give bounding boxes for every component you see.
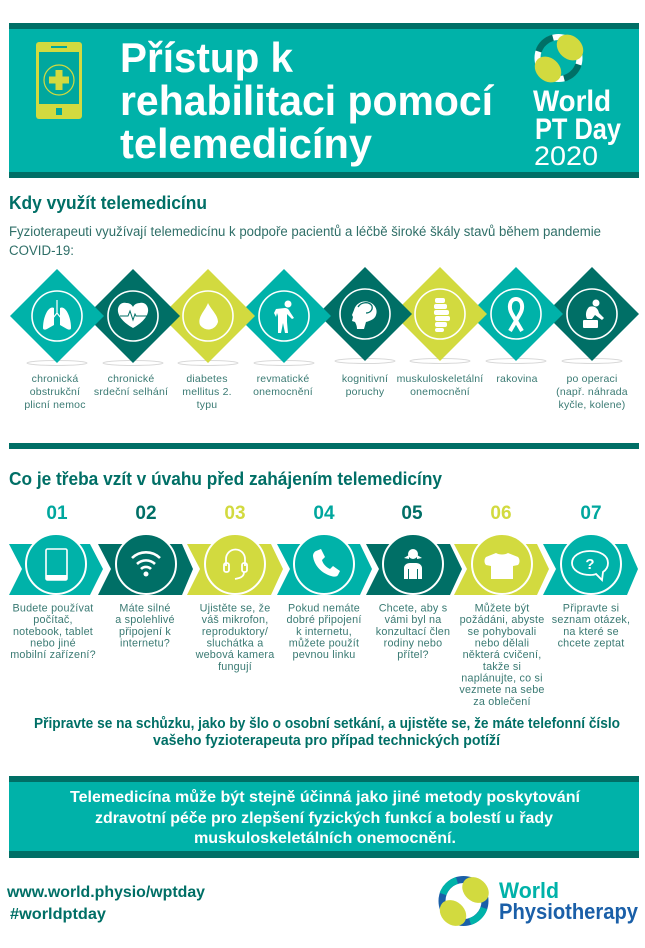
- conclusion banner: [9, 776, 639, 858]
- step descriptions: a spolehlivé: [115, 614, 175, 626]
- step descriptions: [10, 602, 630, 708]
- step descriptions: takže si: [483, 661, 521, 673]
- intro paragraph: Fyzioterapeuti využívají telemedicínu k podpoře pacientů a léčbě široké škály stavů během pandemie: [9, 224, 601, 239]
- step numbers: 05: [401, 503, 423, 524]
- step descriptions: požádáni, abyste: [460, 614, 544, 626]
- step descriptions: nebo jiné: [30, 638, 76, 650]
- condition labels: kognitivní: [342, 373, 388, 385]
- step descriptions: Budete používat: [12, 602, 94, 614]
- step descriptions: počítač,: [33, 614, 73, 626]
- logo: World Physiotherapy: World: [499, 878, 559, 903]
- panel: step chevrons: [9, 534, 638, 595]
- condition labels: onemocnění: [253, 386, 313, 398]
- preparation note: [34, 716, 620, 749]
- condition labels: plicní nemoc: [24, 399, 86, 411]
- step descriptions: vámi byl na: [385, 614, 441, 626]
- step numbers: 03: [224, 503, 246, 524]
- conclusion banner: muskuloskeletálních onemocnění.: [194, 830, 456, 847]
- intro paragraph: COVID-19:: [9, 243, 74, 258]
- heading: what to consider: Co je třeba vzít v úvahu před zahájením telemedicíny: [9, 469, 442, 489]
- icon: phone with medical cross: [36, 42, 82, 119]
- intro paragraph: [9, 224, 601, 258]
- diamond 5: cognitive disorders: [318, 267, 412, 361]
- condition labels: chronické: [108, 373, 154, 385]
- condition labels: kyčle, kolene): [558, 399, 626, 411]
- condition labels: muskuloskeletální: [397, 373, 483, 385]
- logo: World PT Day 2020: World: [533, 85, 611, 118]
- step 2: wifi: [98, 534, 193, 595]
- step 1: device: [9, 534, 103, 595]
- diamond 8: after surgery: [545, 267, 639, 361]
- diamond 7: cancer: [469, 267, 563, 361]
- step descriptions: se pohybovali: [468, 626, 536, 638]
- logo: World PT Day 2020: 2020: [534, 141, 598, 171]
- step descriptions: rodiny nebo: [384, 638, 442, 650]
- logo: World PT Day 2020: [530, 29, 621, 171]
- step descriptions: internetu?: [120, 638, 170, 650]
- step 5: family member: [366, 534, 462, 595]
- step descriptions: nebo dělali: [475, 638, 529, 650]
- heading: when to use telemedicine: Kdy využít telemedicínu: [9, 193, 207, 213]
- condition labels: chronická: [32, 373, 78, 385]
- step 3: headset: [187, 534, 283, 595]
- step descriptions: fungují: [218, 661, 252, 673]
- step 7: questions: ?: [585, 556, 595, 573]
- title: Přístup k: [120, 34, 294, 81]
- step descriptions: pevnou linku: [292, 649, 356, 661]
- step descriptions: Připravte si: [563, 602, 619, 614]
- step descriptions: seznam otázek,: [552, 614, 630, 626]
- step numbers: 04: [313, 503, 335, 524]
- step descriptions: Chcete, aby s: [379, 602, 448, 614]
- step descriptions: Máte silné: [119, 602, 171, 614]
- condition labels: srdeční selhání: [94, 386, 168, 398]
- step descriptions: Ujistěte se, že: [200, 602, 270, 614]
- step descriptions: webová kamera: [195, 649, 274, 661]
- step descriptions: reproduktory/: [202, 626, 268, 638]
- step descriptions: přítel?: [397, 649, 429, 661]
- step descriptions: na které se: [563, 626, 619, 638]
- step descriptions: chcete zeptat: [558, 638, 624, 650]
- conclusion banner: Telemedicína může být stejně účinná jako jiné metody poskytování: [70, 789, 581, 806]
- condition labels: onemocnění: [410, 386, 470, 398]
- step numbers: 02: [135, 503, 157, 524]
- preparation note: Připravte se na schůzku, jako by šlo o osobní setkání, a ujistěte se, že máte telefonní číslo: [34, 716, 620, 732]
- step numbers: 01: [46, 503, 68, 524]
- step numbers: 06: [490, 503, 512, 524]
- diamond 2: chronic heart failure: [86, 269, 180, 363]
- step descriptions: dobré připojení: [286, 614, 362, 626]
- logo: World Physiotherapy: [435, 872, 639, 931]
- step descriptions: Pokud nemáte: [288, 602, 360, 614]
- logo: World PT Day 2020: PT Day: [535, 113, 621, 146]
- condition labels: (např. náhrada: [556, 386, 628, 398]
- footer links: [6, 884, 205, 923]
- step descriptions: připojení k: [119, 626, 171, 638]
- title: [120, 34, 494, 167]
- condition labels: obstrukční: [30, 386, 80, 398]
- step descriptions: k internetu,: [296, 626, 352, 638]
- step descriptions: některá cvičení,: [463, 649, 541, 661]
- condition labels: mellitus 2.: [182, 386, 232, 398]
- condition labels: typu: [197, 399, 217, 411]
- header banner: [9, 23, 639, 178]
- title: telemedicíny: [120, 120, 373, 167]
- step descriptions: Můžete být: [475, 602, 529, 614]
- title: rehabilitaci pomocí: [120, 77, 494, 124]
- footer links: www.world.physio/wptday: [6, 884, 205, 901]
- step numbers: 07: [580, 503, 602, 524]
- step 7: questions: [543, 534, 638, 595]
- step descriptions: vezmete na sebe: [459, 684, 545, 696]
- condition labels: rakovina: [496, 373, 538, 385]
- diamond 1: chronic obstructive pulmonary disease: [10, 269, 104, 363]
- step descriptions: notebook, tablet: [13, 626, 93, 638]
- step 6: clothes: [454, 534, 549, 595]
- panel: conditions diamonds: [10, 267, 639, 366]
- conclusion banner: zdravotní péče pro zlepšení fyzických funkcí a bolestí u řady: [95, 810, 553, 827]
- diamond 6: musculoskeletal: [393, 267, 487, 361]
- condition labels: poruchy: [346, 386, 385, 398]
- preparation note: vašeho fyzioterapeuta pro případ technických potíží: [153, 733, 501, 749]
- step descriptions: za oblečení: [473, 696, 531, 708]
- condition labels: [24, 373, 628, 411]
- step numbers: [46, 503, 602, 524]
- step descriptions: sluchátka a: [207, 638, 263, 650]
- step descriptions: naplánujte, co si: [461, 672, 543, 684]
- step 4: telephone: [277, 534, 372, 595]
- diamond 3: diabetes: [161, 269, 255, 363]
- step descriptions: konzultací člen: [376, 626, 450, 638]
- diamond 4: rheumatic disease: [237, 269, 331, 363]
- step descriptions: váš mikrofon,: [202, 614, 268, 626]
- step descriptions: můžete použít: [289, 638, 359, 650]
- step descriptions: mobilní zařízení?: [10, 649, 96, 661]
- condition labels: po operaci: [566, 373, 618, 385]
- condition labels: revmatické: [257, 373, 309, 385]
- footer links: #worldptday: [10, 906, 106, 923]
- condition labels: diabetes: [186, 373, 228, 385]
